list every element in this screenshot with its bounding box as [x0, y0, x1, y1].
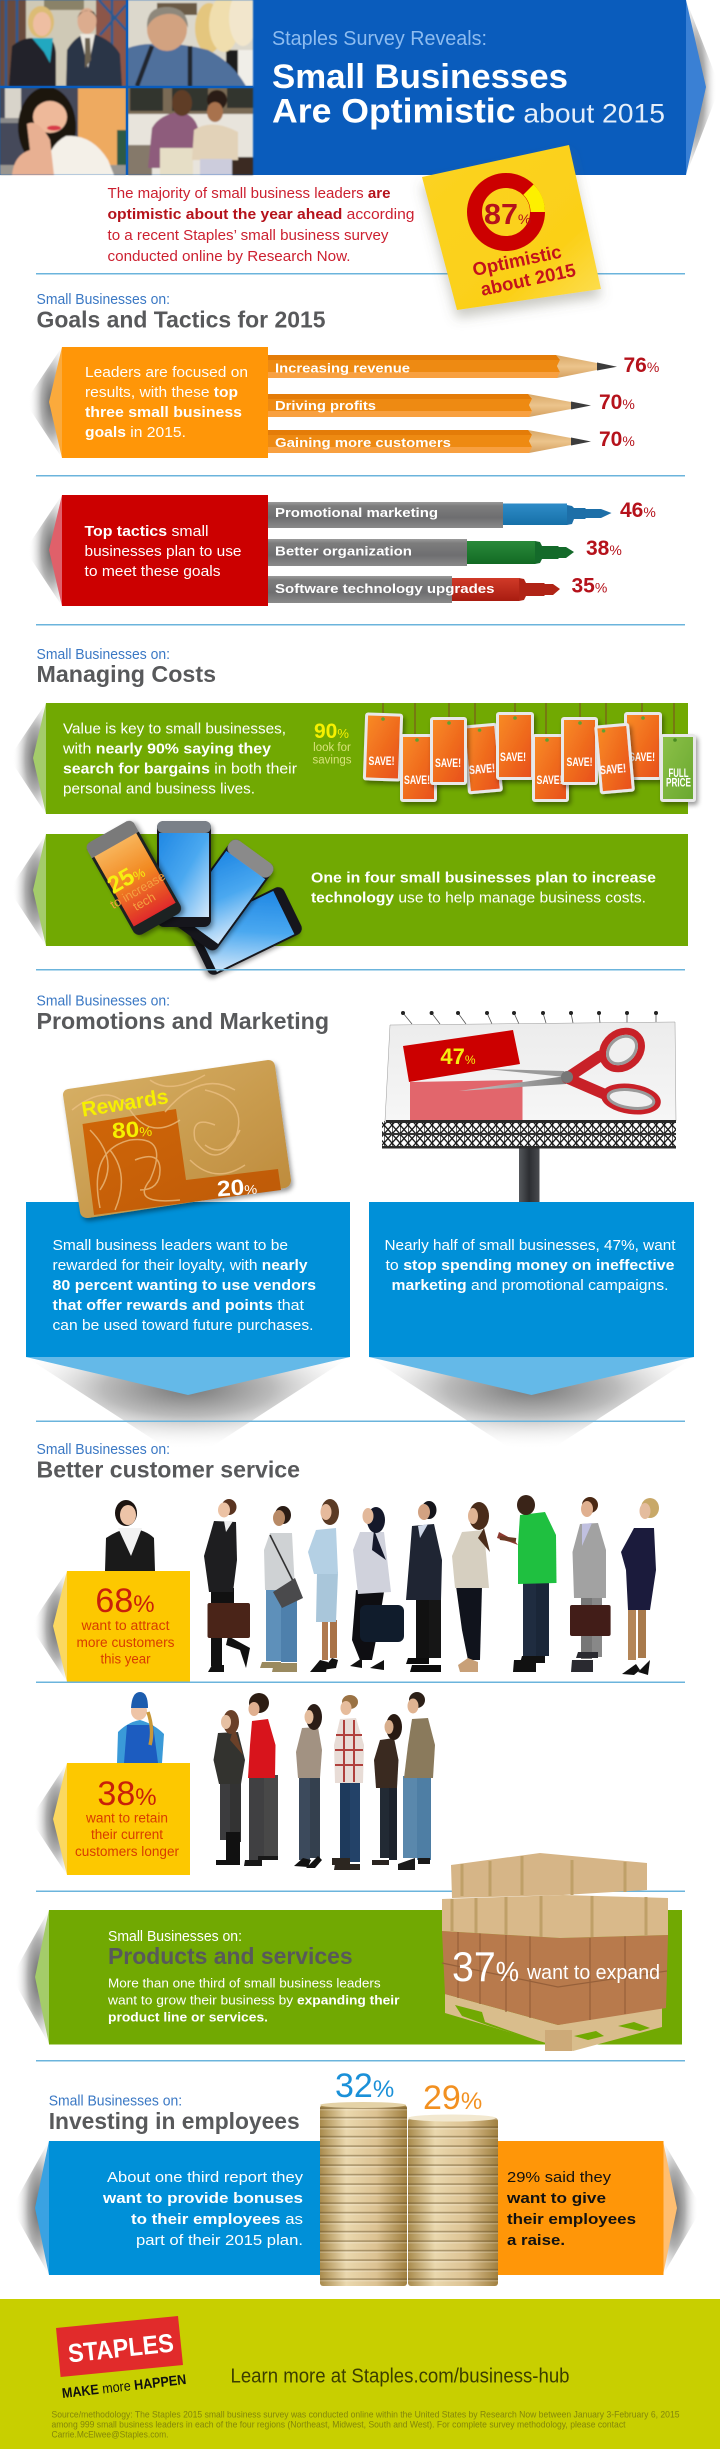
rewards text	[52, 1238, 316, 1334]
arrow tip	[53, 1571, 67, 1682]
lower brown boxes	[442, 1931, 668, 2025]
goals text	[85, 365, 248, 441]
divider	[36, 624, 685, 626]
products text: Small Businesses on:	[108, 1928, 242, 1945]
full price tag	[660, 734, 696, 802]
person 4	[350, 1507, 404, 1670]
goals text: goals in 2015.	[85, 425, 186, 441]
products text: want to grow their business by expanding their	[107, 1992, 399, 2008]
person a	[214, 1710, 245, 1865]
footer	[0, 2299, 720, 2449]
orange box	[498, 2141, 664, 2275]
panel: 38% retain customers	[30, 1763, 190, 1875]
section heading: better customer service: Better customer service	[36, 1456, 300, 1482]
save tag 2: SAVE!	[404, 775, 430, 787]
divider	[36, 1890, 685, 1892]
bonuses text	[102, 2169, 304, 2249]
title: Are Optimistic about 2015	[272, 92, 665, 130]
section heading: goals and tactics	[36, 291, 326, 332]
save tag 3: SAVE!	[435, 758, 461, 770]
attract caption	[76, 1618, 175, 1666]
marker: software technology upgrades 35%	[268, 574, 607, 603]
scissors	[459, 1023, 659, 1115]
card bars	[82, 1109, 281, 1215]
phone 1 with 25%: 25%	[103, 857, 150, 899]
phone 1 with 25%: to increase	[108, 869, 168, 912]
save tag 2	[400, 734, 437, 802]
90 percent callout: 90%	[314, 720, 349, 743]
source text	[52, 2410, 680, 2440]
arrow shadow	[30, 1763, 67, 1875]
90 percent callout: look for	[313, 742, 351, 754]
products text: product line or services.	[108, 2010, 268, 2024]
tactics text: Top tactics small	[84, 524, 209, 540]
divider	[36, 2060, 685, 2062]
arrow tip	[53, 1763, 67, 1875]
goals text: three small business	[85, 405, 242, 421]
save tag 9	[624, 712, 662, 780]
arrow shadow	[25, 495, 62, 606]
38 percent value: 38%	[97, 1775, 157, 1813]
sticky note: 87% optimistic	[422, 145, 601, 310]
section heading: better customer service	[36, 1441, 300, 1482]
raises text: a raise.	[507, 2232, 565, 2249]
products text: More than one third of small business leaders	[108, 1976, 381, 1990]
note caption: Optimistic	[470, 241, 563, 280]
80 percent: 80%	[111, 1116, 153, 1143]
staples logo	[56, 2316, 183, 2377]
arrow tip	[33, 703, 46, 814]
marker: promotional marketing 46%: 46%	[620, 499, 656, 522]
section heading: better customer service: Small Businesses on:	[36, 1441, 170, 1458]
panel: rewards text box	[26, 1202, 350, 1462]
yellow box	[67, 1763, 190, 1875]
photo: shop owner with guitars	[128, 0, 257, 86]
photo: cafe owners	[128, 88, 253, 175]
marker: better organization 38%: Better organization	[275, 544, 412, 558]
card swirl pattern	[72, 1075, 245, 1210]
32 percent label: 32%	[335, 2067, 394, 2105]
intro text: optimistic about the year ahead according	[108, 206, 414, 223]
figure: customer service agent	[105, 1500, 155, 1571]
panel: bonuses	[12, 2141, 324, 2275]
queue of nine customers	[204, 1495, 659, 1675]
tactics text: to meet these goals	[84, 564, 220, 580]
arrow tip	[663, 2141, 677, 2275]
rewards text: 80 percent wanting to use vendors	[52, 1278, 316, 1294]
header banner	[0, 0, 720, 175]
37 percent value: 37%	[452, 1943, 519, 1990]
tactics text	[84, 524, 241, 580]
pencil: gaining more customers 70%	[268, 428, 635, 453]
bargains text: search for bargains in both their	[63, 762, 297, 778]
source text: among 999 small business leaders in each of the four regions (Northeast, Midwest, South and West). For complete survey methodology, please contact	[52, 2420, 626, 2430]
divider	[36, 969, 685, 970]
save tag 5: SAVE!	[500, 752, 526, 764]
divider	[36, 273, 685, 274]
save tag 1	[363, 712, 403, 782]
37 percent value: want to expand	[526, 1962, 660, 1984]
section heading: investing in employees	[49, 2092, 300, 2134]
section heading: managing costs	[36, 646, 216, 687]
banner arrow tip	[686, 0, 706, 175]
coin stack 29%	[408, 2114, 498, 2286]
person 3	[308, 1499, 339, 1672]
donut chart 87%	[474, 180, 545, 244]
full price tag: PRICE	[666, 778, 691, 790]
marker: promotional marketing 46%: Promotional marketing	[275, 505, 438, 520]
source text: Carrie.McElwee@Staples.com.	[52, 2430, 168, 2440]
green box	[46, 834, 688, 946]
37 percent value	[452, 1943, 660, 1990]
person 6	[452, 1502, 490, 1672]
second tier boxes	[442, 1895, 668, 1938]
arrow shadow	[9, 834, 46, 946]
card body	[63, 1060, 291, 1218]
title: Small Businesses	[272, 58, 568, 96]
arrow tip	[49, 347, 62, 458]
goals text: results, with these top	[85, 385, 238, 401]
rewards card	[63, 1060, 291, 1218]
note paper	[422, 145, 601, 310]
staples logo: STAPLES	[67, 2328, 175, 2368]
pencil: increasing revenue 76%: 76%	[624, 354, 659, 377]
rewards text: rewarded for their loyalty, with nearly	[52, 1258, 308, 1274]
phone 2	[157, 821, 211, 927]
bonuses text: part of their 2015 plan.	[136, 2232, 303, 2249]
save tag 3	[430, 717, 467, 785]
panel: tactics	[25, 495, 656, 606]
goals text: Leaders are focused on	[85, 365, 248, 381]
intro text: The majority of small business leaders are	[108, 185, 390, 202]
learn more link: Learn more at Staples.com/business-hub	[230, 2366, 570, 2388]
arrow shadow	[26, 1357, 350, 1462]
marketing text	[384, 1238, 676, 1294]
person e	[372, 1714, 402, 1865]
orange box	[62, 347, 268, 458]
arrow tip	[26, 1357, 350, 1395]
rewards label: Rewards	[80, 1085, 170, 1122]
20 percent: 20%	[216, 1174, 258, 1201]
save tag 5	[496, 712, 534, 780]
kicker: Staples Survey Reveals:	[272, 27, 487, 50]
person 2	[260, 1506, 303, 1672]
person 1	[204, 1499, 250, 1672]
billboard	[382, 1013, 676, 1202]
section heading: promotions and marketing: Small Businesses on:	[36, 992, 170, 1010]
retain caption: their current	[91, 1827, 163, 1842]
bonuses text: About one third report they	[107, 2169, 304, 2186]
pallet	[445, 1994, 662, 2051]
person 7	[497, 1495, 556, 1672]
retain caption: customers longer	[75, 1844, 180, 1859]
divider	[36, 1682, 685, 1683]
29 percent label: 29%	[423, 2079, 482, 2117]
bonuses text: want to provide bonuses	[102, 2190, 303, 2207]
person b	[244, 1693, 278, 1866]
save tag 7: SAVE!	[566, 757, 592, 769]
billboard truss	[382, 1120, 676, 1148]
banner background	[0, 0, 686, 175]
pencil: gaining more customers 70%: 70%	[599, 428, 635, 451]
phones fan	[84, 819, 304, 977]
divider	[36, 1420, 685, 1422]
panel: raises	[498, 2141, 702, 2275]
pencil: driving profits 70%: Driving profits	[275, 398, 376, 413]
pencil: increasing revenue 76%	[268, 354, 659, 378]
retain caption: want to retain	[85, 1810, 168, 1826]
figure: worker in blue apron	[117, 1692, 164, 1763]
blue box	[369, 1202, 694, 1357]
section heading: investing in employees: Investing in employees	[49, 2108, 300, 2134]
section heading: investing in employees: Small Businesses on:	[49, 2092, 182, 2110]
save tag 6	[532, 734, 569, 802]
panel: bargains	[9, 703, 696, 814]
raises text: 29% said they	[507, 2169, 612, 2186]
arrow shadow	[663, 2141, 702, 2275]
87 percent value: 87%	[484, 199, 531, 231]
panel: goals	[25, 347, 659, 458]
marketing text: Nearly half of small businesses, 47%, want	[384, 1238, 676, 1254]
raises text: their employees	[507, 2211, 636, 2228]
section heading: managing costs: Small Businesses on:	[36, 646, 170, 663]
title	[272, 58, 665, 130]
person d	[332, 1695, 364, 1870]
save tag 1: SAVE!	[368, 756, 394, 768]
products text: Products and services	[108, 1943, 353, 1969]
panel: 68% attract customers	[30, 1571, 190, 1682]
pink block	[410, 1080, 522, 1122]
phone 1 with 25%: tech	[131, 890, 158, 914]
products text	[107, 1928, 399, 2024]
intro text	[108, 185, 414, 265]
arrow tip	[35, 1910, 49, 2044]
save tag 9: SAVE!	[629, 752, 655, 764]
rewards text: Small business leaders want to be	[52, 1238, 288, 1254]
footer background	[0, 2299, 720, 2449]
marker: promotional marketing 46%	[268, 499, 656, 528]
attract caption: this year	[100, 1652, 151, 1666]
section heading: managing costs: Managing Costs	[36, 661, 216, 687]
note caption	[470, 239, 578, 301]
blue box	[26, 1202, 350, 1357]
coin stacks	[320, 2067, 498, 2286]
intro text: to a recent Staples’ small business survey	[108, 227, 389, 244]
upper tier boxes	[451, 1853, 647, 1898]
arrow tip	[49, 495, 62, 606]
technology text	[311, 870, 656, 906]
red paper with 47%: 47%	[440, 1044, 476, 1069]
person 9	[621, 1498, 659, 1675]
collage gaps	[0, 0, 253, 175]
rewards text: can be used toward future purchases.	[52, 1318, 314, 1334]
marker: better organization 38%	[268, 537, 622, 566]
arrow tip	[35, 2141, 49, 2275]
technology text: technology use to help manage business costs.	[311, 890, 646, 906]
arrow shadow	[25, 347, 62, 458]
person c	[294, 1704, 322, 1868]
divider	[36, 475, 685, 476]
marker: software technology upgrades 35%: Software technology upgrades	[275, 581, 494, 596]
photo: two business people	[0, 0, 126, 86]
raises text	[506, 2169, 636, 2249]
arrow shadow	[369, 1357, 694, 1462]
marketing text: marketing and promotional campaigns.	[392, 1278, 668, 1294]
arrow shadow	[12, 1910, 49, 2044]
section heading: goals and tactics: Goals and Tactics for 2015	[36, 306, 326, 332]
blue box	[49, 2141, 324, 2275]
person f	[398, 1692, 435, 1870]
section heading: goals and tactics: Small Businesses on:	[36, 291, 170, 308]
section heading: promotions and marketing	[36, 992, 329, 1034]
marker: software technology upgrades 35%: 35%	[572, 574, 607, 598]
billboard pole	[519, 1148, 540, 1202]
technology text: One in four small businesses plan to increase	[311, 870, 656, 886]
panel: products and services	[12, 1853, 682, 2051]
pencil: gaining more customers 70%: Gaining more customers	[275, 435, 451, 450]
full price tag: FULL	[668, 768, 688, 780]
save tag 8	[594, 723, 635, 794]
queue of six customers	[214, 1692, 435, 1870]
red box	[62, 495, 268, 606]
retain caption	[75, 1810, 180, 1859]
note caption: about 2015	[479, 259, 578, 300]
bargains text: personal and business lives.	[63, 782, 255, 798]
banner arrow shadow	[686, 0, 720, 175]
coin stack 32%	[320, 2102, 407, 2286]
billboard panel	[385, 1022, 676, 1121]
arrow tip	[33, 834, 46, 946]
rewards text: that offer rewards and points that	[52, 1298, 304, 1314]
person 5	[406, 1501, 442, 1672]
pencil: increasing revenue 76%: Increasing revenue	[275, 360, 410, 376]
red paper with 47%	[403, 1030, 520, 1082]
save tag 8: SAVE!	[600, 763, 627, 777]
phone 3	[172, 837, 276, 953]
90 percent callout	[312, 720, 352, 766]
section heading: promotions and marketing: Promotions and Marketing	[36, 1008, 329, 1034]
arrow shadow	[30, 1571, 67, 1682]
intro text: conducted online by Research Now.	[108, 248, 350, 265]
save tag 7	[561, 717, 598, 785]
save tag 4	[462, 723, 503, 794]
photo collage	[0, 0, 257, 175]
tactics text: businesses plan to use	[84, 544, 241, 560]
person 8	[570, 1497, 611, 1672]
attract caption: want to attract	[80, 1618, 170, 1633]
panel: technology	[9, 819, 688, 977]
billboard lamps	[403, 1013, 656, 1024]
bargains text: with nearly 90% saying they	[62, 742, 271, 758]
arrow shadow	[9, 703, 46, 814]
marketing text: to stop spending money on ineffective	[386, 1258, 674, 1274]
tagline: MAKE more HAPPEN	[61, 2371, 187, 2401]
marker: better organization 38%: 38%	[586, 537, 622, 560]
green box	[49, 1910, 682, 2044]
phone 1 with 25%	[84, 819, 184, 937]
pencil: driving profits 70%: 70%	[599, 391, 635, 414]
save tag 4: SAVE!	[469, 763, 496, 777]
pencil: driving profits 70%	[268, 391, 635, 417]
pallet of boxes	[442, 1853, 668, 2051]
bargains text	[62, 722, 297, 798]
save tag 6: SAVE!	[536, 775, 562, 787]
raises text: want to give	[506, 2190, 606, 2207]
68 percent value: 68%	[95, 1582, 155, 1620]
bonuses text: to their employees as	[131, 2211, 303, 2228]
yellow box	[67, 1571, 190, 1682]
bargains text: Value is key to small businesses,	[63, 722, 286, 738]
photo: smiling woman	[0, 87, 126, 175]
tag strings	[383, 703, 674, 739]
90 percent callout: savings	[312, 754, 352, 766]
phone 4	[188, 885, 304, 977]
green box	[46, 703, 688, 814]
attract caption: more customers	[76, 1635, 175, 1650]
arrow shadow	[12, 2141, 49, 2275]
panel: ineffective marketing text box	[369, 1202, 694, 1462]
price tags	[363, 703, 696, 802]
arrow tip	[369, 1357, 694, 1395]
